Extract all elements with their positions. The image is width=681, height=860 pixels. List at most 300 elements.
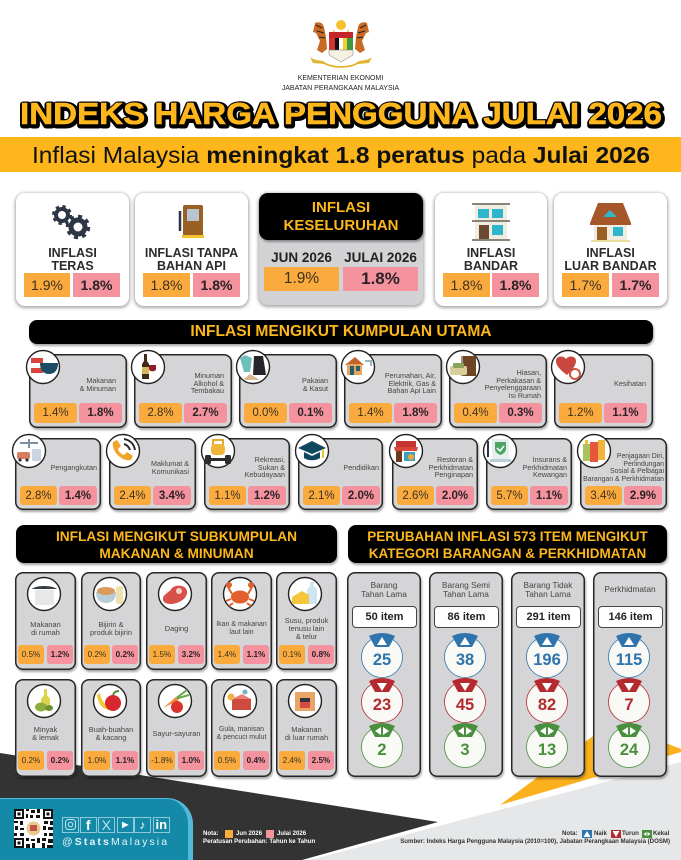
jun value: -1.8%: [151, 756, 173, 765]
julai value: 2.5%: [312, 756, 330, 765]
source: Sumber: Indeks Harga Pengguna Malaysia (2010=100), Jabatan Perangkaan Malaysia (DOSM): [400, 838, 670, 845]
heading: subkumpulan: INFLASI MENGIKUT SUBKUMPULAN: [56, 528, 297, 544]
icon: youtube: [117, 817, 134, 832]
card: hiasan: [449, 354, 547, 428]
panel: inflasi bandar: [435, 193, 547, 306]
jun value: [279, 751, 305, 770]
label: & lemak: [32, 733, 59, 742]
julai value: [624, 486, 662, 505]
legend note: left: [203, 830, 318, 845]
label: Alkohol &: [194, 379, 224, 388]
julai value: [243, 751, 269, 770]
label: Perumahan, Air,: [385, 371, 436, 380]
label: [48, 246, 97, 272]
icon: food bowl: [26, 350, 60, 384]
label: Isi Rumah: [509, 391, 541, 400]
jun value: 0.4%: [462, 407, 489, 419]
card: restoran: [392, 438, 478, 510]
icon: facebook: [80, 817, 96, 832]
food card: sayur-sayuran: [146, 679, 207, 777]
jun value: 2.4%: [119, 490, 146, 502]
label: Barang Semi: [442, 580, 490, 590]
jun value: [585, 486, 622, 505]
jun value: [143, 273, 190, 297]
label: [583, 452, 664, 483]
julai value: [343, 267, 418, 291]
label: [385, 371, 436, 395]
label: [211, 621, 272, 637]
label: Makanan: [291, 725, 322, 734]
julai value: 1.8%: [402, 407, 429, 419]
label: Tahan Lama: [525, 588, 571, 598]
label: & kacang: [96, 733, 126, 742]
title: INDEKS HARGA PENGGUNA JULAI 2026: [21, 98, 663, 132]
julai value: 0.2%: [51, 756, 69, 765]
label: Minyak: [34, 725, 57, 734]
icon: takeaway box: [288, 684, 322, 718]
jun value: 0.2%: [22, 756, 40, 765]
julai value: [178, 645, 204, 664]
jun value: [454, 403, 497, 423]
icon: vegetables: [158, 684, 192, 718]
label: produk bijirin: [90, 628, 132, 637]
panel: inflasi teras: [16, 193, 129, 306]
card: rekreasi: [204, 438, 290, 510]
julai value: [112, 645, 138, 664]
icon: pot: [26, 576, 62, 612]
julai value: 1.0%: [182, 756, 200, 765]
jun value: [84, 751, 110, 770]
item card: barang tidak tahan lama: [511, 572, 585, 777]
jun value: [18, 645, 44, 664]
julai value: [59, 486, 97, 505]
label: BANDAR: [464, 258, 518, 272]
label: Sukan &: [258, 463, 285, 472]
label: INFLASI TANPA: [145, 246, 238, 260]
nota label: Nota:: [562, 830, 578, 837]
icon: wine bottle: [130, 350, 166, 384]
badge: kekal: 3: [460, 741, 470, 759]
jun value: 1.8%: [451, 277, 482, 293]
label: [429, 455, 473, 479]
label: Minuman: [194, 371, 224, 380]
julai value: [79, 403, 122, 423]
peratusan note: Peratusan Perubahan: Tahun ke Tahun: [203, 838, 315, 845]
jun value: [18, 751, 44, 770]
icon: meat: [158, 576, 192, 612]
label: Barangan & Perkhidmatan: [583, 476, 664, 483]
badge: naik: 25: [373, 651, 391, 669]
food card: daging: [146, 572, 207, 670]
jun value: [244, 403, 287, 423]
julai value: 0.1%: [297, 407, 324, 419]
jun value: [114, 486, 151, 505]
jun value: 1.4%: [42, 407, 69, 419]
jun value: 5.7%: [496, 490, 523, 502]
subtitle banner: [0, 137, 681, 172]
label: Pengangkutan: [51, 463, 97, 472]
icon: phone: [106, 434, 140, 468]
heading: subkumpulan: MAKANAN & MINUMAN: [99, 546, 254, 560]
heading: [259, 193, 423, 240]
food card: makanan di luar rumah: [276, 679, 337, 777]
julai value: 3.4%: [159, 490, 185, 502]
icon: house and tap: [340, 350, 376, 384]
label: laut lain: [229, 629, 254, 636]
julai value: [47, 645, 73, 664]
label: Makanan: [30, 620, 61, 629]
label: Daging: [165, 624, 188, 633]
label: Perlindungan: [623, 461, 664, 468]
julai value: 0.8%: [312, 650, 330, 659]
swatch: julai: [266, 830, 274, 838]
jun value: [491, 486, 528, 505]
icon: shield document: [482, 434, 518, 468]
card: pendidikan: [298, 438, 383, 510]
icon: fuel pump: [178, 205, 204, 238]
jun value: [149, 645, 175, 664]
label: Penginapan: [435, 470, 473, 479]
jun value: [84, 645, 110, 664]
label: [15, 726, 76, 742]
julai value: [308, 751, 334, 770]
julai value: 1.8%: [361, 269, 400, 288]
icon: x: X: [102, 817, 111, 833]
icon: transport: [12, 434, 46, 468]
label: Perkhidmatan: [523, 463, 567, 472]
icon: instagram: [62, 817, 78, 832]
icon: gears: [52, 205, 90, 240]
label: Penyelenggaraan: [485, 383, 541, 392]
card: pakaian & kasut: [239, 354, 337, 428]
label: INFLASI: [467, 246, 515, 260]
item card: barang semi tahan lama: [429, 572, 503, 777]
jun value: 1.2%: [567, 407, 594, 419]
panel: inflasi keseluruhan: [259, 193, 423, 305]
card: minuman alkohol: [134, 354, 232, 428]
jun value: 3.4%: [590, 490, 617, 502]
label: Kebudayaan: [245, 470, 285, 479]
badge: naik: 115: [616, 651, 642, 669]
swatch: naik: [582, 830, 592, 838]
item card: barang tahan lama: [347, 572, 421, 777]
label: Ikan & makanan: [216, 621, 267, 628]
label: [564, 246, 657, 272]
icon: sweets: [223, 684, 257, 718]
julai value: [289, 403, 332, 423]
label: TERAS: [51, 258, 94, 272]
icon: house: [590, 203, 631, 242]
badge: naik: [526, 633, 568, 678]
label: [191, 371, 224, 395]
label: Perkhidmatan: [604, 584, 656, 594]
jun value: [209, 486, 246, 505]
julai value: 0.3%: [507, 407, 534, 419]
jun value: [349, 403, 392, 423]
item count: [352, 606, 417, 628]
icon: furniture: [446, 350, 480, 384]
ministry name: [282, 75, 400, 92]
julai value: 1.1%: [247, 650, 265, 659]
julai value: [47, 751, 73, 770]
jun value: 1.5%: [153, 650, 171, 659]
badge: naik: [444, 633, 486, 678]
panel: inflasi tanpa bahan api: [135, 193, 248, 306]
badge: kekal: 2: [377, 741, 387, 759]
food card: minyak: [15, 679, 76, 777]
item count: 86 item: [448, 611, 485, 623]
icon: heart: [550, 350, 586, 384]
julai value: [153, 486, 191, 505]
julai value: 1.8%: [201, 277, 232, 293]
julai value: 0.4%: [247, 756, 265, 765]
label: Penjagaan Diri,: [617, 453, 664, 460]
jun value: 1.9%: [31, 277, 63, 293]
turun label: Turun: [622, 830, 639, 837]
card: makanan & minuman: [29, 354, 127, 428]
label: [145, 246, 238, 272]
label: di rumah: [31, 628, 60, 637]
julai value: 1.2%: [254, 490, 280, 502]
label: Barang: [371, 580, 397, 590]
food card: gula: [211, 679, 272, 777]
julai value: 1.7%: [620, 277, 651, 293]
card: penjagaan diri: [580, 438, 667, 510]
jun value: 1.1%: [214, 490, 241, 502]
QR code: [14, 809, 53, 848]
julai value: [612, 273, 659, 297]
icon: milk and cheese: [288, 577, 322, 611]
jun value: [279, 645, 305, 664]
jun value: 1.9%: [284, 270, 319, 287]
label: Tembakau: [191, 386, 224, 395]
icon: crab: [222, 576, 258, 612]
julai value: [604, 403, 647, 423]
heading: kumpulan utama: INFLASI MENGIKUT KUMPULAN UTAMA: [190, 323, 492, 340]
icon: clothes: [236, 350, 270, 384]
jun value: [303, 486, 340, 505]
label: Tahan Lama: [361, 588, 407, 598]
label: Kesihatan: [614, 379, 646, 388]
label: & Kasut: [303, 384, 328, 393]
label: [276, 617, 337, 640]
badge: kekal: [526, 723, 568, 768]
label: di luar rumah: [285, 733, 328, 742]
badge: naik: [362, 633, 402, 678]
item count: [598, 606, 663, 628]
food card: bijirin: [81, 572, 141, 670]
label: [245, 455, 285, 479]
badge: turun: [526, 678, 568, 722]
badge: turun: [608, 678, 650, 722]
label: Sayur-sayuran: [152, 729, 201, 738]
label: [523, 455, 567, 479]
heading: INFLASI: [312, 198, 370, 216]
jun value: 2.6%: [402, 490, 429, 502]
label: [485, 368, 541, 400]
jun value: [139, 403, 182, 423]
label: Restoran &: [437, 455, 473, 464]
julai value: [243, 645, 269, 664]
label: & telur: [296, 632, 317, 641]
julai value: [112, 751, 138, 770]
badge: turun: [362, 678, 402, 722]
julai value: 1.1%: [536, 490, 562, 502]
icon: graduation cap: [294, 434, 330, 468]
ministry name: KEMENTERIAN EKONOMI: [298, 75, 383, 82]
jun value: 0.5%: [218, 756, 236, 765]
heading: 573 item: [348, 525, 667, 563]
julai value: [436, 486, 474, 505]
label: Makanan: [86, 376, 116, 385]
label: [211, 726, 272, 742]
jun value: [214, 751, 240, 770]
badge: kekal: [362, 723, 402, 768]
label: [80, 376, 116, 393]
julai value: [342, 486, 380, 505]
food card: makanan di rumah: [15, 572, 76, 670]
badge: turun: 7: [624, 696, 634, 714]
label: [464, 246, 518, 272]
julai value: [73, 273, 120, 297]
label: Perkakasan &: [496, 376, 541, 385]
label: Rekreasi,: [255, 455, 285, 464]
card: maklumat: [109, 438, 196, 510]
icon: tiktok: ♪: [139, 818, 145, 832]
icon: x: [98, 817, 114, 832]
emblem: Malaysian coat of arms: [310, 20, 372, 68]
icon: facebook: f: [86, 817, 91, 833]
icon: building: [472, 203, 510, 241]
badge: kekal: 13: [538, 741, 556, 759]
badge: naik: 38: [456, 651, 474, 669]
jun value: [20, 486, 57, 505]
jun value: [559, 403, 602, 423]
swatch: kekal: [642, 830, 652, 838]
badge: kekal: [608, 723, 650, 768]
icon: youtube: ▶: [122, 820, 128, 829]
label: Maklumat &: [151, 459, 189, 468]
label: [276, 726, 337, 742]
label: INFLASI: [48, 246, 97, 260]
jun value: 1.4%: [357, 407, 384, 419]
card: perumahan: [344, 354, 442, 428]
julai value: 2.0%: [442, 490, 468, 502]
label: Tahan Lama: [443, 588, 489, 598]
julai label: Julai 2026: [277, 830, 306, 837]
julai value: 1.8%: [500, 277, 531, 293]
julai label: JULAI 2026: [344, 250, 417, 265]
julai value: 0.2%: [116, 650, 134, 659]
item count: 291 item: [526, 611, 571, 623]
heading: KESELURUHAN: [283, 217, 398, 234]
jun value: 2.8%: [147, 407, 174, 419]
label: Insurans &: [533, 455, 567, 464]
jun value: 2.4%: [283, 756, 301, 765]
badge: turun: [444, 678, 486, 722]
food card: buah-buahan: [81, 679, 141, 777]
card: kesihatan: [554, 354, 653, 428]
item count: 50 item: [366, 611, 403, 623]
label: LUAR BANDAR: [564, 258, 657, 272]
card: pengangkutan: [15, 438, 101, 510]
icon: linkedin: in: [155, 817, 167, 832]
label: Bijirin &: [98, 620, 124, 629]
card: insurans: [486, 438, 572, 510]
label: [30, 620, 61, 637]
label: Susu, produk: [285, 616, 328, 625]
item card: perkhidmatan: [593, 572, 667, 777]
subtitle banner: Inflasi Malaysia meningkat 1.8 peratus pada Julai 2026: [32, 142, 650, 168]
label: Sosial & Pelbagai: [610, 468, 664, 475]
food card: ikan: [211, 572, 272, 670]
footer social panel: [0, 798, 193, 860]
swatch: jun: [225, 830, 233, 838]
jun value: [149, 751, 175, 770]
julai value: 1.8%: [87, 407, 114, 419]
label: [302, 376, 328, 393]
julai value: 1.4%: [65, 490, 91, 502]
badge: naik: 196: [533, 651, 561, 669]
label: Gula, manisan: [219, 726, 264, 733]
badge: turun: 82: [538, 696, 556, 714]
label: [81, 726, 141, 742]
jun value: 0.0%: [252, 407, 279, 419]
item count: 146 item: [608, 611, 653, 623]
jun value: [264, 267, 339, 291]
food card: susu: [276, 572, 337, 670]
naik label: Naik: [594, 830, 607, 837]
julai value: [394, 403, 437, 423]
julai value: 2.0%: [348, 490, 374, 502]
julai value: [499, 403, 542, 423]
julai value: [492, 273, 539, 297]
icon: tiktok: [134, 817, 150, 832]
jun value: [214, 645, 240, 664]
heading: 573 item: KATEGORI BARANGAN & PERKHIDMATAN: [369, 546, 646, 560]
label: [429, 580, 503, 598]
label: & Minuman: [80, 384, 116, 393]
julai value: 2.7%: [192, 407, 219, 419]
julai value: 1.2%: [51, 650, 69, 659]
julai value: [193, 273, 240, 297]
icon: linkedin: [153, 817, 170, 832]
social handle: @StatsMalaysia: [62, 836, 169, 848]
jun label: Jun 2026: [236, 830, 262, 837]
jun value: 1.0%: [88, 756, 106, 765]
julai value: 1.1%: [116, 756, 134, 765]
icon: cereal: [92, 576, 128, 612]
julai value: [178, 751, 204, 770]
nota label: Nota:: [203, 830, 219, 837]
label: & pencuci mulut: [217, 734, 266, 741]
label: Bahan Api Lain: [388, 386, 436, 395]
label: [90, 620, 132, 637]
label: Komunikasi: [152, 467, 189, 476]
panel: inflasi luar bandar: [554, 193, 667, 306]
label: Barang Tidak: [524, 580, 572, 590]
jun value: [34, 403, 77, 423]
jun value: 1.4%: [218, 650, 236, 659]
jun value: 2.8%: [25, 490, 52, 502]
icon: dumbbell and kettlebell: [200, 434, 236, 468]
badge: turun: 23: [373, 696, 391, 714]
legend note: right: [392, 830, 670, 845]
icon: oil and olives: [27, 684, 61, 718]
jun label: JUN 2026: [271, 250, 332, 265]
julai value: [184, 403, 227, 423]
item count: [434, 606, 499, 628]
